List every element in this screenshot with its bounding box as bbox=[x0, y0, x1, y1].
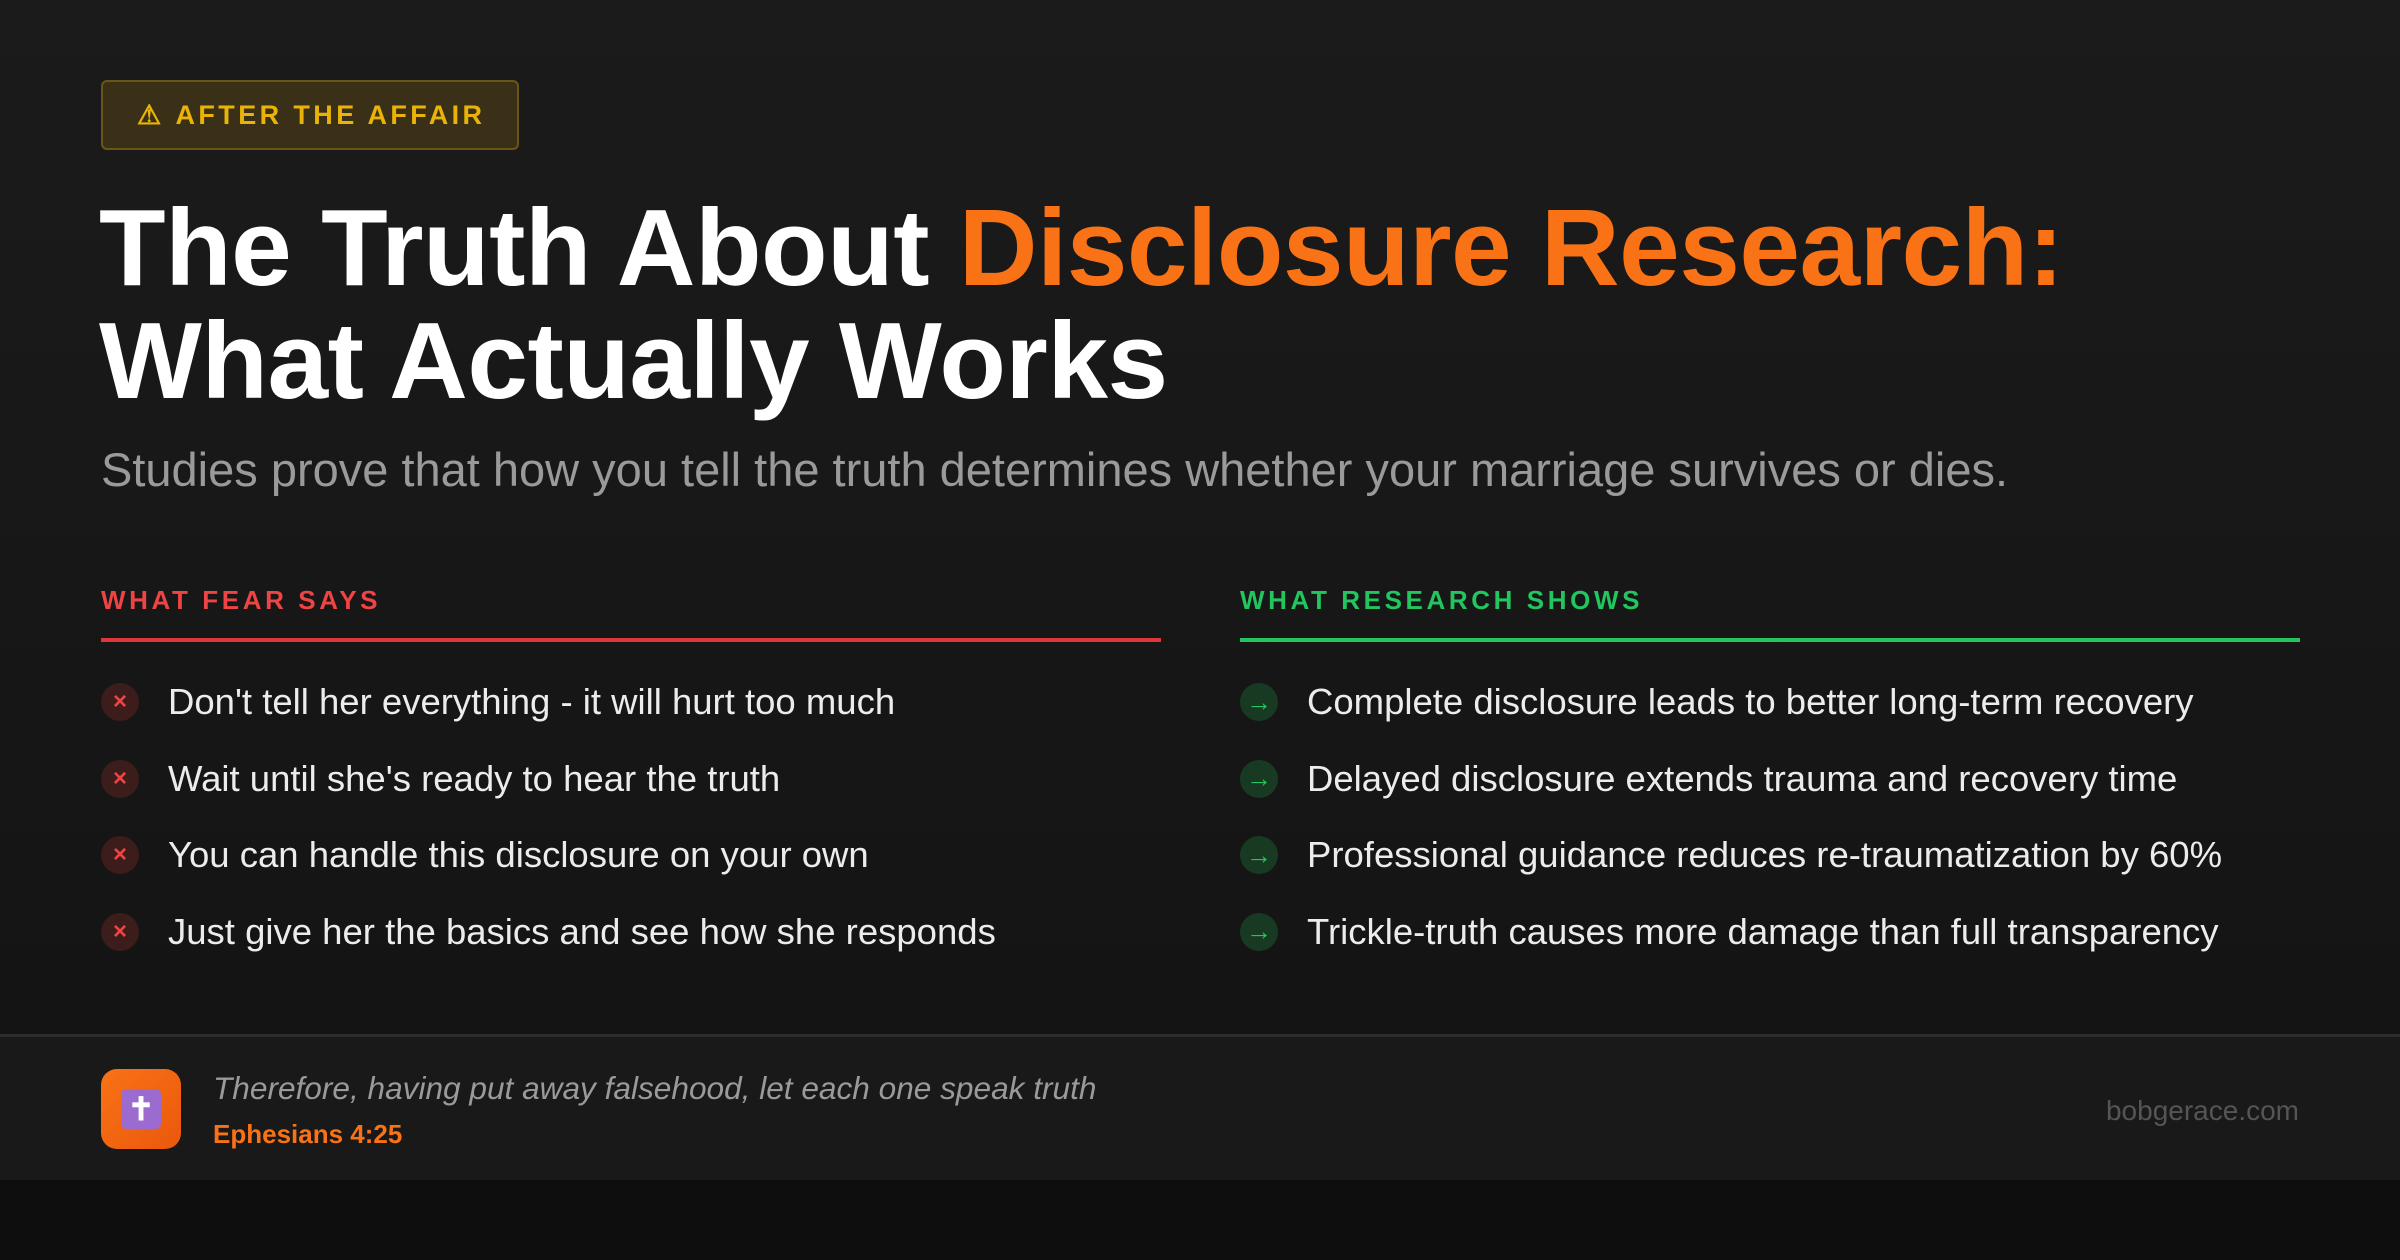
item: × bbox=[113, 688, 127, 715]
title bbox=[99, 187, 2064, 422]
item: Wait until she's ready to hear the truth bbox=[168, 758, 780, 799]
reference: Ephesians 4:25 bbox=[213, 1119, 402, 1149]
footer bbox=[0, 1034, 2400, 1180]
item: Delayed disclosure extends trauma and recovery time bbox=[1307, 758, 2177, 799]
item: Trickle-truth causes more damage than full transparency bbox=[1307, 911, 2219, 952]
panel: what research shows bbox=[1240, 585, 2300, 952]
badge: ⚠ AFTER THE AFFAIR bbox=[137, 100, 485, 130]
title: What Actually Works bbox=[99, 300, 1168, 422]
item: → bbox=[1246, 763, 1272, 793]
icon: cross: ✝ bbox=[128, 1091, 154, 1127]
item: × bbox=[113, 918, 127, 945]
item: Just give her the basics and see how she responds bbox=[168, 911, 996, 952]
item: You can handle this disclosure on your own bbox=[168, 834, 869, 875]
item: → bbox=[1246, 916, 1272, 946]
quote: Therefore, having put away falsehood, let each one speak truth bbox=[213, 1070, 1096, 1106]
panel: what fear says: WHAT FEAR SAYS bbox=[101, 585, 381, 615]
panel: what fear says bbox=[101, 585, 1161, 952]
badge bbox=[101, 80, 519, 150]
item: Professional guidance reduces re-traumatization by 60% bbox=[1307, 834, 2222, 875]
icon: cross bbox=[101, 1069, 181, 1149]
item: × bbox=[113, 841, 127, 868]
item: × bbox=[113, 765, 127, 792]
panel: what research shows: WHAT RESEARCH SHOWS bbox=[1240, 585, 1643, 615]
item: → bbox=[1246, 840, 1272, 870]
item: Complete disclosure leads to better long-term recovery bbox=[1307, 681, 2194, 722]
item: → bbox=[1246, 687, 1272, 717]
site: bobgerace.com bbox=[2106, 1095, 2299, 1126]
title: The Truth About Disclosure Research: bbox=[99, 187, 2064, 309]
item: Don't tell her everything - it will hurt too much bbox=[168, 681, 895, 722]
subtitle: Studies prove that how you tell the truth determines whether your marriage survives or dies. bbox=[101, 443, 2008, 496]
